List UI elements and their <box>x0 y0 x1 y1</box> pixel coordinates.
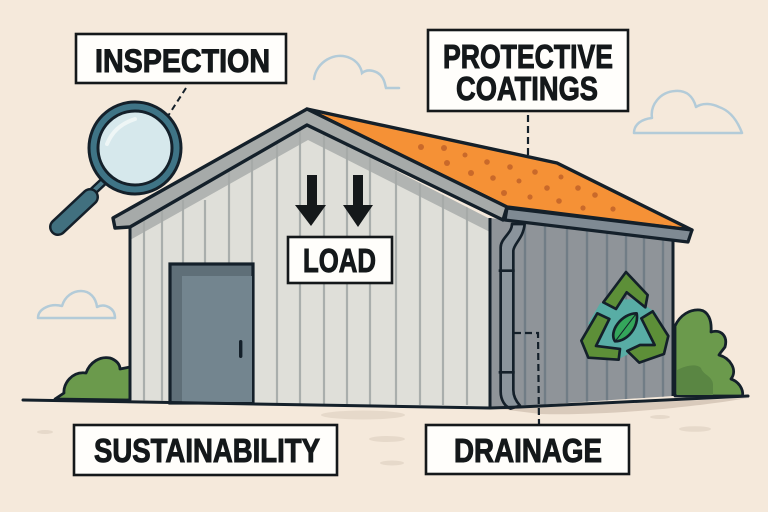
left arrow <box>581 313 620 360</box>
top arrow <box>603 272 648 309</box>
label: drainage: DRAINAGE <box>454 432 602 469</box>
roof surface <box>307 109 692 230</box>
magnifying glass <box>58 102 181 227</box>
bush: right <box>675 310 743 396</box>
bush shade <box>677 365 713 395</box>
label: load: LOAD <box>303 242 376 279</box>
gable fascia <box>113 109 507 228</box>
teal backdrop <box>588 299 657 358</box>
building <box>23 109 748 409</box>
wall outlines <box>130 218 673 408</box>
lens <box>89 102 181 194</box>
connector: inspection <box>168 88 186 116</box>
label: inspection: INSPECTION <box>95 43 270 79</box>
siding lines: front wall <box>144 120 467 405</box>
cloud: top centre <box>314 56 399 88</box>
ground shadows <box>37 398 748 466</box>
door handle <box>239 340 242 358</box>
handle <box>58 181 104 227</box>
label: load <box>288 237 392 283</box>
label: drainage <box>426 425 629 474</box>
front wall <box>130 125 490 408</box>
right arrow <box>627 311 668 363</box>
side wall <box>490 218 673 408</box>
label: protective coatings <box>428 30 628 111</box>
label: protective coatings: COATINGS <box>456 70 598 107</box>
label: sustainability <box>74 425 337 475</box>
siding lines: side wall <box>525 220 663 405</box>
ground line <box>23 396 748 408</box>
bush: left <box>55 358 130 400</box>
connector: protective coatings <box>527 115 529 156</box>
label: inspection <box>76 34 286 83</box>
leaf <box>613 313 637 341</box>
cloud: top right <box>634 91 742 133</box>
downspout <box>499 224 525 409</box>
cloud: left <box>38 291 115 318</box>
label: sustainability: SUSTAINABILITY <box>94 432 320 469</box>
label: protective coatings: PROTECTIVE <box>443 38 613 75</box>
load arrows <box>295 175 373 227</box>
right fascia <box>505 208 692 242</box>
eave shadow band <box>130 125 490 240</box>
recycling symbol <box>581 272 668 363</box>
connector: drainage <box>514 333 539 425</box>
door <box>170 264 253 403</box>
roof speckles <box>418 144 616 212</box>
